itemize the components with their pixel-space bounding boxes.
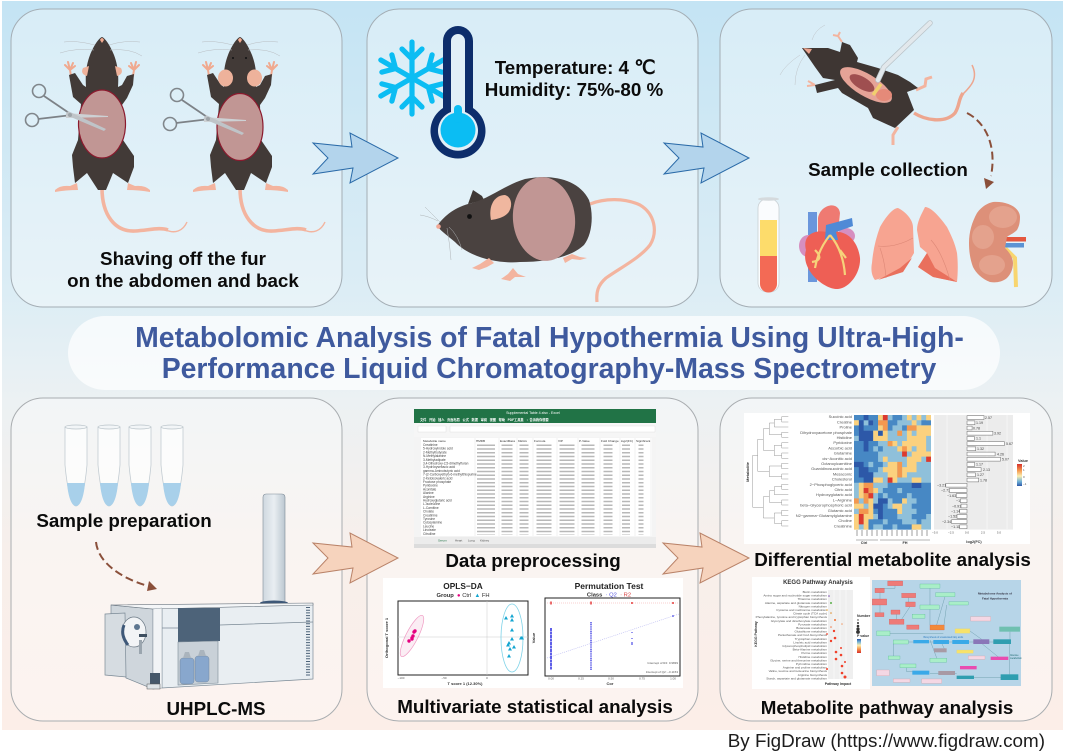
spreadsheet metabolite names: Fructose phosphate xyxy=(423,480,451,484)
text: sample preparation: Sample preparation xyxy=(36,510,212,531)
panel: UHPLC-MS xyxy=(11,398,342,721)
spreadsheet metabolite names: Arginine xyxy=(423,495,435,499)
chart: log2FC bars: −0.91 xyxy=(952,504,961,508)
chart: permutation test: Value xyxy=(531,632,536,643)
diagram: metabolic pathway map: Fatal Hypothermia xyxy=(982,596,1008,600)
spreadsheet header row: Formula xyxy=(534,439,546,443)
chart: KEGG pathway dot plot: Glutathione metabolism xyxy=(794,630,827,634)
chart: log2FC bars: −1.11 xyxy=(951,525,960,529)
chart: log2FC bars: 0.78 xyxy=(973,426,980,430)
chart: KEGG pathway dot plot: Beta-Alanine metabolism xyxy=(793,648,827,652)
spreadsheet metabolite names: 2-Ketoisovaleric acid xyxy=(423,476,453,480)
heatmap legend: −1 xyxy=(1023,482,1027,486)
text: differential analysis: Differential metabolite analysis xyxy=(754,549,1031,570)
spreadsheet metabolite names: gamma-Aminobutyric acid xyxy=(423,469,460,473)
arrow: blue step 2 to 3 xyxy=(664,133,749,183)
chart: log2FC bars: FH xyxy=(902,541,908,545)
chart: log2FC bars: 2.5 xyxy=(981,530,985,534)
chart: OPLS-DA score plot: 0 xyxy=(486,676,488,680)
text: multivariate analysis: Multivariate statistical analysis xyxy=(397,696,673,717)
credit line: By FigDraw (https://www.figdraw.com) xyxy=(728,730,1045,751)
diagram: metabolic pathway map xyxy=(872,580,1022,686)
text: UHPLC-MS: UHPLC-MS xyxy=(166,698,266,719)
chart: log2FC bars: −2.71 xyxy=(941,489,950,493)
spreadsheet metabolite names: Creatinine xyxy=(423,513,438,517)
chart: KEGG pathway dot plot: Pathway Impact xyxy=(825,682,852,686)
chart: permutation test: 0.50 xyxy=(608,676,614,680)
chart: OPLS-DA score plot: −100 xyxy=(398,676,405,680)
metabolite labels: N2−gamma−Glutamylglutamine xyxy=(796,513,853,518)
spreadsheet screenshot xyxy=(414,409,656,548)
icon: heart xyxy=(799,205,860,289)
chart: log2FC bars: −1 xyxy=(956,499,960,503)
metabolite labels: Dihydroxyacetone phosphate xyxy=(800,430,853,435)
diagram: metabolic pathway map: metabolism xyxy=(1010,657,1022,660)
text: sample collection: Sample collection xyxy=(808,159,968,180)
chart: KEGG pathway dot plot: Starch, aspartate and glutamate metabolism xyxy=(766,676,827,680)
chart: KEGG pathway dot plot: Pyruvate metabolism xyxy=(798,622,827,626)
chart: permutation test: Intercept of Q2: −0.1153 xyxy=(646,670,678,674)
chart: KEGG pathway dot plot: Linoleic acid metabolism xyxy=(793,640,827,644)
spreadsheet metabolite names: Tyrosine xyxy=(423,517,435,521)
panel: differential and pathway analysis xyxy=(720,398,1052,721)
spreadsheet metabolite names: 3-Hydroxysebacic acid xyxy=(423,465,455,469)
heatmap legend xyxy=(1017,459,1028,486)
spreadsheet header row: Metabolite name xyxy=(423,439,446,443)
chart: log2FC bars: 1.32 xyxy=(977,447,984,451)
arrow: orange step 5 to 6 xyxy=(663,533,749,583)
chart backdrop xyxy=(383,578,683,688)
metabolite labels: Proline xyxy=(840,425,853,430)
chart: KEGG pathway dot plot: Purine metabolism xyxy=(801,651,827,655)
metabolite labels: Octanoylcarnitine xyxy=(821,461,853,466)
icon: lungs xyxy=(871,207,958,282)
chart: log2FC bars: 5.0 xyxy=(997,530,1001,534)
axis label: Metabolite: Metabolite xyxy=(745,461,750,482)
metabolite labels: L−Arginine xyxy=(833,497,853,502)
spreadsheet metabolite names: 3,4-Dihydroxy-2,5-dimethylfuran xyxy=(423,462,469,466)
spreadsheet metabolite names: Linoleate xyxy=(423,528,436,532)
icon: thermometer xyxy=(430,26,486,159)
chart: KEGG pathway dot plot: Cysteine and methionine metabolism xyxy=(776,608,827,612)
text: data preprocessing: Data preprocessing xyxy=(445,550,621,571)
icon: snowflake xyxy=(376,42,448,114)
icon: kidney xyxy=(969,202,1026,287)
spreadsheet metabolite names: Aconitate xyxy=(423,487,437,491)
spreadsheet header row: P-Value xyxy=(579,439,590,443)
spreadsheet header row: Fold Change xyxy=(601,439,619,443)
chart: log2FC bars: 4.26 xyxy=(997,452,1004,456)
spreadsheet metabolite names: 7-(2-Carboxyethyl)-6-methylthiopurine xyxy=(423,473,477,477)
spreadsheet metabolite names: Pyridoxine xyxy=(423,484,438,488)
spreadsheet sheet tabs: Kidney xyxy=(480,538,490,542)
chart: permutation test: 0.25 xyxy=(578,676,584,680)
arrow: dashed to instrument xyxy=(96,542,157,591)
chart: permutation test: Permutation Test xyxy=(575,581,644,591)
metabolite labels: Guanidinosuccinic acid xyxy=(811,466,852,471)
chart: KEGG pathway dot plot: P value xyxy=(857,634,869,638)
chart: KEGG pathway dot plot: Glycine, serine and threonine metabolism xyxy=(770,658,827,662)
chart: permutation test: Intercept of R2: 0.9839 xyxy=(647,661,678,665)
chart: KEGG pathway dot plot: KEGG Pathway Analysis xyxy=(783,580,854,586)
spreadsheet metabolite names: Creatinine xyxy=(423,443,438,447)
text: conditions: Humidity: 75%-80 % xyxy=(485,79,664,100)
icon: mouse dorsal view with scissors xyxy=(164,37,325,232)
spreadsheet header row: Significant xyxy=(636,439,650,443)
arrow: blue step 1 to 2 xyxy=(313,133,398,183)
diagram: metabolic pathway map: Metabolome Analysis of xyxy=(978,592,1012,596)
metabolite labels: beta−Glycerophosphoric acid xyxy=(800,503,852,508)
panel: cold exposure xyxy=(367,9,698,307)
metabolite labels: Glutamine xyxy=(834,451,853,456)
chart: permutation test: 0.75 xyxy=(639,676,645,680)
chart: OPLS-DA score plot: T score 1 (12.30%) xyxy=(448,681,483,686)
icon: dissected mouse with tweezers xyxy=(780,23,975,145)
panel: sample collection xyxy=(720,9,1052,307)
metabolite labels: Glutamic acid xyxy=(828,508,852,513)
chart: OPLS-DA score plot: −50 xyxy=(441,676,447,680)
chart: log2FC bars xyxy=(856,415,1013,545)
chart: log2FC bars: 2.57 xyxy=(985,416,992,420)
chart: KEGG pathway dot plot: Tryptophan metabolism xyxy=(795,637,827,641)
spreadsheet window title: Supplemental Table 4.xlsx - Excel xyxy=(506,411,560,415)
metabolite labels: Mesaconic xyxy=(833,471,852,476)
chart: OPLS-DA score plot: Orthogonal T score 1 xyxy=(384,617,389,658)
spreadsheet ribbon: 文件 开始 插入 页面布局 公式 数据 审阅 视图 帮助 PDF工具集 ♀ 告诉我你想要 xyxy=(420,417,549,422)
metabolite labels: Succinic acid xyxy=(829,414,852,419)
chart: KEGG pathway dot plot: Nitrogen metabolism xyxy=(799,604,827,608)
diagram: metabolic pathway map: Biosynthesis of unsaturated fatty acids xyxy=(923,636,964,639)
chart: log2FC bars: 1.78 xyxy=(980,478,987,482)
metabolite labels: Hydroxyglutaric acid xyxy=(816,492,852,497)
metabolite labels: Choline xyxy=(838,518,853,523)
text: conditions: Temperature: 4 ℃ xyxy=(495,57,655,78)
chart: log2FC bars: Ctrl xyxy=(861,541,867,545)
chart: log2FC bars: −2.34 xyxy=(942,520,951,524)
spreadsheet metabolite names: N-Methylalanine xyxy=(423,454,446,458)
metabolite labels: Ascorbic acid xyxy=(828,445,852,450)
metabolite labels xyxy=(796,414,853,528)
spreadsheet metabolite names: Cytosylamine xyxy=(423,521,442,525)
metabolite labels: Histidine xyxy=(837,435,853,440)
metabolite labels: Creatinine xyxy=(834,523,853,528)
spreadsheet header row: ExactMass xyxy=(500,439,516,443)
spreadsheet metabolite names: Alanine xyxy=(423,491,434,495)
spreadsheet header row: VIP xyxy=(558,439,563,443)
chart: log2FC bars: −1.52 xyxy=(948,515,957,519)
chart: log2FC bars: 1.1 xyxy=(976,437,981,441)
chart: KEGG pathway dot plot: Arginine and proline metabolism xyxy=(783,666,827,670)
chart: KEGG pathway dot plot: Phenylalanine, tyrosine and tryptophan biosynthesis xyxy=(756,615,827,619)
chart: log2FC bars: 0.0 xyxy=(965,530,969,534)
chart: log2FC bars: log2(FC) xyxy=(966,540,982,544)
chart backdrop xyxy=(744,413,1030,544)
chart: KEGG pathway dot plot: Butanoate metabolism xyxy=(796,626,827,630)
heatmap legend: 2 xyxy=(1023,464,1025,468)
heading: shaving: Shaving off the fur xyxy=(100,248,266,269)
chart: log2FC bars: 5.67 xyxy=(1006,442,1013,446)
chart: KEGG pathway dot plot: Amino sugar and nucleotide sugar metabolism xyxy=(763,594,827,598)
chart: KEGG pathway dot plot xyxy=(752,577,871,689)
diagram: metabolic pathway map: Glucose xyxy=(1010,655,1019,657)
chart: KEGG pathway dot plot: Biotin metabolism xyxy=(803,590,827,594)
chart: log2FC bars: −1.63 xyxy=(947,494,956,498)
spreadsheet header row: log2(FC) xyxy=(621,439,633,443)
metabolite labels: 2−Phosphoglyceric acid xyxy=(810,482,852,487)
chart: log2FC bars: 1.19 xyxy=(976,421,983,425)
spreadsheet header row: HMDB xyxy=(476,439,485,443)
icon: shaved mouse side view xyxy=(420,174,654,302)
icon: blood tube xyxy=(758,197,779,292)
chart: KEGG pathway dot plot: Citrate cycle (TCA cycle) xyxy=(793,612,827,616)
chart: KEGG pathway dot plot: Histidine metabolism xyxy=(798,655,827,659)
title text: Metabolomic Analysis of Fatal Hypothermia Using Ultra-High- xyxy=(135,322,964,354)
spreadsheet metabolite names: L-Isoleucine xyxy=(423,502,440,506)
chart: log2FC bars: 1.17 xyxy=(976,463,983,467)
chart: permutation test xyxy=(531,581,680,686)
chart: log2FC bars: −3.21 xyxy=(937,484,946,488)
chart: KEGG pathway dot plot: Pantothenate and CoA biosynthesis xyxy=(778,633,827,637)
chart: OPLS-DA score plot: OPLS−DA xyxy=(443,581,483,591)
chart: log2FC bars: 2.13 xyxy=(983,468,990,472)
chart: log2FC bars: 1.27 xyxy=(977,473,984,477)
spreadsheet metabolite names: Citrulline xyxy=(423,532,436,536)
spreadsheet sheet tabs: Lung xyxy=(468,538,475,542)
chart: permutation test: 1.00 xyxy=(670,676,676,680)
metabolite labels: Cholesterol xyxy=(832,477,852,482)
panel: data analysis xyxy=(367,398,698,721)
chart: log2FC bars: −2.5 xyxy=(948,530,954,534)
metabolite labels: Citric acid xyxy=(834,487,852,492)
metabolite labels: cis−Aconitic acid xyxy=(822,456,852,461)
chart: KEGG pathway dot plot: Thiamine metabolism xyxy=(798,597,827,601)
icon: mouse ventral view with scissors xyxy=(26,37,187,232)
chart: KEGG pathway dot plot: Glyoxylate and dicarboxylate metabolism xyxy=(771,619,827,623)
spreadsheet sheet tabs: Serum xyxy=(438,538,447,542)
heatmap legend: 1 xyxy=(1023,468,1025,472)
panel: shaving the fur xyxy=(11,9,342,307)
chart: log2FC bars: −1.14 xyxy=(951,510,960,514)
heatmap legend: 0 xyxy=(1023,475,1025,479)
icon: UHPLC-MS instrument xyxy=(105,494,313,689)
chart: permutation test: Class · Q2 · R2 xyxy=(587,592,631,598)
spreadsheet metabolite names xyxy=(423,443,477,536)
icon: sample tubes xyxy=(65,425,183,506)
heading: shaving: on the abdomen and back xyxy=(67,270,299,291)
spreadsheet metabolite names: Leucine xyxy=(423,524,434,528)
chart: KEGG pathway dot plot: Valine, leucine and isoleucine biosynthesis xyxy=(769,669,827,673)
heatmap legend: Value xyxy=(1018,459,1028,463)
text: pathway analysis: Metabolite pathway analysis xyxy=(761,697,1013,718)
chart: log2FC bars: −5.0 xyxy=(932,530,938,534)
arrow: orange step 4 to 5 xyxy=(313,533,398,583)
title text: Performance Liquid Chromatography-Mass Spectrometry xyxy=(162,353,937,385)
arrow: dashed to organs xyxy=(967,113,994,189)
spreadsheet metabolite names: L-Carnitine xyxy=(423,506,439,510)
chart: OPLS-DA score plot: Group ● Ctrl ▲ FH xyxy=(436,593,490,599)
chart: KEGG pathway dot plot: Glycerophospholipid metabolism xyxy=(782,644,827,648)
spreadsheet metabolite names: 2-Methylbutyrate xyxy=(423,450,447,454)
chart: OPLS-DA score plot xyxy=(384,581,528,686)
chart: KEGG pathway dot plot: KEGG Pathway xyxy=(754,621,758,647)
chart: dendrogram xyxy=(753,417,788,526)
spreadsheet sheet tabs: Heart xyxy=(455,538,463,542)
spreadsheet metabolite names: Hydroxyglutaric acid xyxy=(423,498,452,502)
title banner xyxy=(68,316,1000,390)
spreadsheet header row: KEGG xyxy=(518,439,528,443)
chart: log2FC bars: 3.92 xyxy=(994,432,1001,436)
spreadsheet metabolite names: 5-Hydroxyindole acid xyxy=(423,447,453,451)
chart: permutation test: Cor xyxy=(607,681,614,686)
chart: log2FC bars: 5.07 xyxy=(1002,458,1009,462)
chart: heatmap xyxy=(854,415,931,530)
chart: KEGG pathway dot plot: Pyrimidine metabolism xyxy=(796,662,827,666)
spreadsheet metabolite names: 3-Methyladipate xyxy=(423,458,446,462)
chart: KEGG pathway dot plot: Number xyxy=(857,614,871,618)
chart: KEGG pathway dot plot: Arginine biosynthesis xyxy=(798,673,827,677)
metabolite labels: Creatine xyxy=(837,419,853,424)
metabolite labels: Pyridoxine xyxy=(833,440,853,445)
chart: permutation test: 0.00 xyxy=(548,676,554,680)
chart: KEGG pathway dot plot: Alanine, aspartate and glutamate metabolism xyxy=(765,601,827,605)
spreadsheet metabolite names: Cholate xyxy=(423,510,434,514)
